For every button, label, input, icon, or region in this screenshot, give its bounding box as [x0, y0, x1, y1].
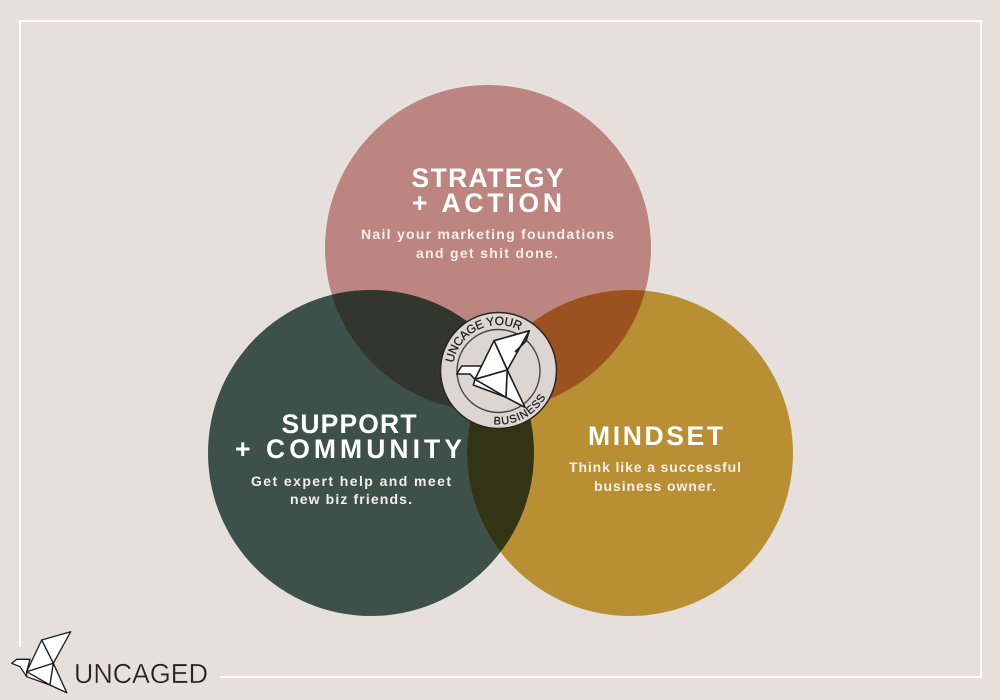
text: strategy + action: and get shit done.	[416, 245, 558, 261]
badge curved text	[445, 316, 545, 425]
icon: origami bird	[457, 331, 529, 407]
text: support + community: SUPPORT	[282, 409, 416, 439]
text: mindset: Think like a successful	[569, 459, 741, 475]
text: strategy + action: Nail your marketing foundations	[361, 226, 614, 242]
text: mindset: business owner.	[594, 478, 716, 494]
logo wordmark: UNCAGED	[74, 658, 208, 689]
text: support + community: new biz friends.	[290, 491, 412, 507]
circle: strategy + action	[325, 85, 651, 411]
text: mindset: MINDSET	[588, 421, 723, 451]
overlap: strategy and support	[332, 290, 466, 407]
icon: logo origami bird	[12, 632, 71, 693]
text: strategy + action: + ACTION	[412, 188, 562, 218]
center badge	[440, 312, 558, 429]
circle: mindset	[467, 290, 793, 616]
badge curved text: UNCAGE YOUR	[445, 316, 522, 362]
text: support + community: Get expert help and meet	[251, 473, 451, 489]
text: strategy + action	[361, 163, 614, 261]
badge curved text: BUSINESS	[494, 394, 545, 425]
venn diagram	[208, 85, 793, 616]
logo: uncaged	[12, 632, 208, 693]
overlap: support and mindset	[467, 420, 534, 552]
text: support + community	[235, 409, 462, 507]
text: mindset	[569, 421, 741, 494]
overlap: strategy and mindset	[532, 290, 646, 399]
text: strategy + action: STRATEGY	[412, 163, 564, 193]
circle: support + community	[208, 290, 534, 616]
text: support + community: + COMMUNITY	[235, 434, 462, 464]
